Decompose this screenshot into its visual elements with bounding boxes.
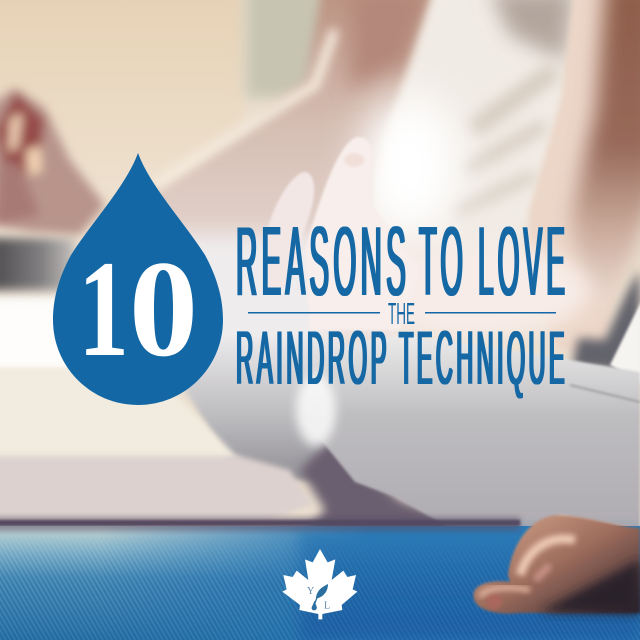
right arm inner tone <box>572 0 640 310</box>
left forearm <box>150 0 436 340</box>
divider label: the: THE <box>388 296 415 331</box>
heel highlight <box>520 539 575 575</box>
heel fold <box>535 565 550 580</box>
logo letter L: L <box>324 600 330 611</box>
white shirt glow <box>360 95 460 235</box>
mauve mat <box>0 456 312 520</box>
title <box>236 206 569 401</box>
brown elbow shadow <box>350 0 430 90</box>
numeral 10: 1 <box>78 232 129 385</box>
icon: blue water drop <box>53 153 223 405</box>
pale haze under the title <box>350 240 590 340</box>
mat top mauve fade <box>0 517 520 531</box>
left floor: white band <box>0 296 170 372</box>
fingers of the front hand <box>265 137 420 330</box>
icon: white maple leaf logo <box>282 549 357 619</box>
blurred wall <box>0 0 245 250</box>
forearm highlight <box>155 30 335 185</box>
leggings seam <box>570 385 640 402</box>
heading line: reasons to love: TO <box>419 206 467 316</box>
right arm <box>530 0 640 360</box>
dark floor behind the knee <box>295 440 530 545</box>
blue mat darker side <box>100 526 640 640</box>
dark furniture behind hand <box>0 238 75 290</box>
shirt hem at right <box>610 300 640 384</box>
pale mid band <box>100 235 330 355</box>
blurred window <box>246 0 356 98</box>
toe shading <box>486 593 502 609</box>
left hand <box>0 88 105 235</box>
logo letter Y: Y <box>307 586 314 597</box>
shirt shadow at top <box>490 0 574 60</box>
blue yoga mat <box>0 526 640 640</box>
dark shadow under the foot <box>540 560 640 614</box>
dark wall gap <box>572 270 640 372</box>
grey leggings <box>296 335 640 542</box>
numeral 10: 0 <box>129 232 198 385</box>
shirt folds <box>455 70 555 212</box>
logo sprig <box>314 584 328 604</box>
leggings highlight on knee <box>296 374 336 446</box>
grey wall behind the knee <box>155 340 345 480</box>
logo droplet <box>312 601 317 610</box>
white shirt <box>372 0 574 300</box>
toe light <box>480 588 530 597</box>
foot <box>473 515 640 614</box>
mat ribs <box>0 535 640 640</box>
dark mat line <box>0 520 520 526</box>
cream mat <box>0 368 240 460</box>
blue mat shade <box>300 532 640 640</box>
